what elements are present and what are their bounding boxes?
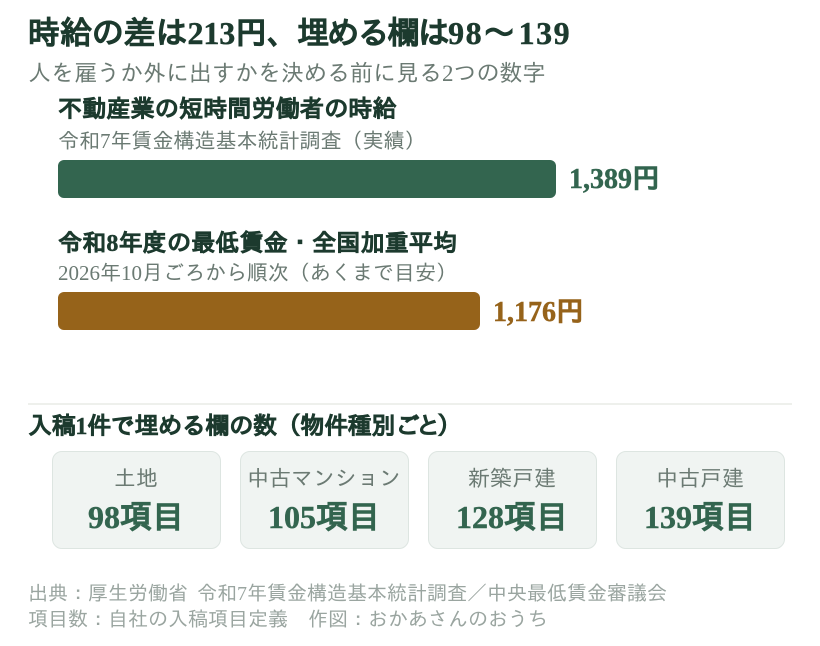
footnote: 項目数：自社の入稿項目定義 作図：おかあさんのおうち <box>28 609 548 631</box>
subtitle: 人を雇うか外に出すかを決める前に見る2つの数字 <box>28 61 546 86</box>
bar: minimum wage <box>58 292 480 330</box>
footnote: 出典：厚生労働省 令和7年賃金構造基本統計調査／中央最低賃金審議会 <box>28 583 667 605</box>
label: minimum wage: 令和8年度の最低賃金・全国加重平均 <box>58 231 457 257</box>
card: used house <box>616 451 784 549</box>
card: used condo: 中古マンション <box>247 466 401 491</box>
card: used house: 139項目 <box>644 499 756 535</box>
section heading: 入稿1件で埋める欄の数（物件種別ごと） <box>28 414 461 440</box>
title: 時給の差は213円、埋める欄は98〜139 <box>28 15 571 51</box>
bar: real estate wage <box>58 160 556 198</box>
card: used condo <box>240 451 408 549</box>
card: land <box>52 451 220 549</box>
card: new house: 新築戸建 <box>468 466 556 491</box>
source: minimum wage: 2026年10月ごろから順次（あくまで目安） <box>58 261 457 285</box>
card: land: 土地 <box>114 466 158 491</box>
card: used house: 中古戸建 <box>656 466 744 491</box>
card: used condo: 105項目 <box>268 499 380 535</box>
footnote <box>28 583 667 631</box>
source: real estate wage: 令和7年賃金構造基本統計調査（実績） <box>58 129 426 153</box>
panel: wage bars <box>58 96 660 330</box>
card: new house: 128項目 <box>456 499 568 535</box>
card: new house <box>428 451 596 549</box>
card: land: 98項目 <box>88 499 184 535</box>
label: real estate wage: 不動産業の短時間労働者の時給 <box>58 97 397 123</box>
value: 1,389 yen: 1,389円 <box>569 164 660 195</box>
value: 1,176 yen: 1,176円 <box>493 297 584 328</box>
